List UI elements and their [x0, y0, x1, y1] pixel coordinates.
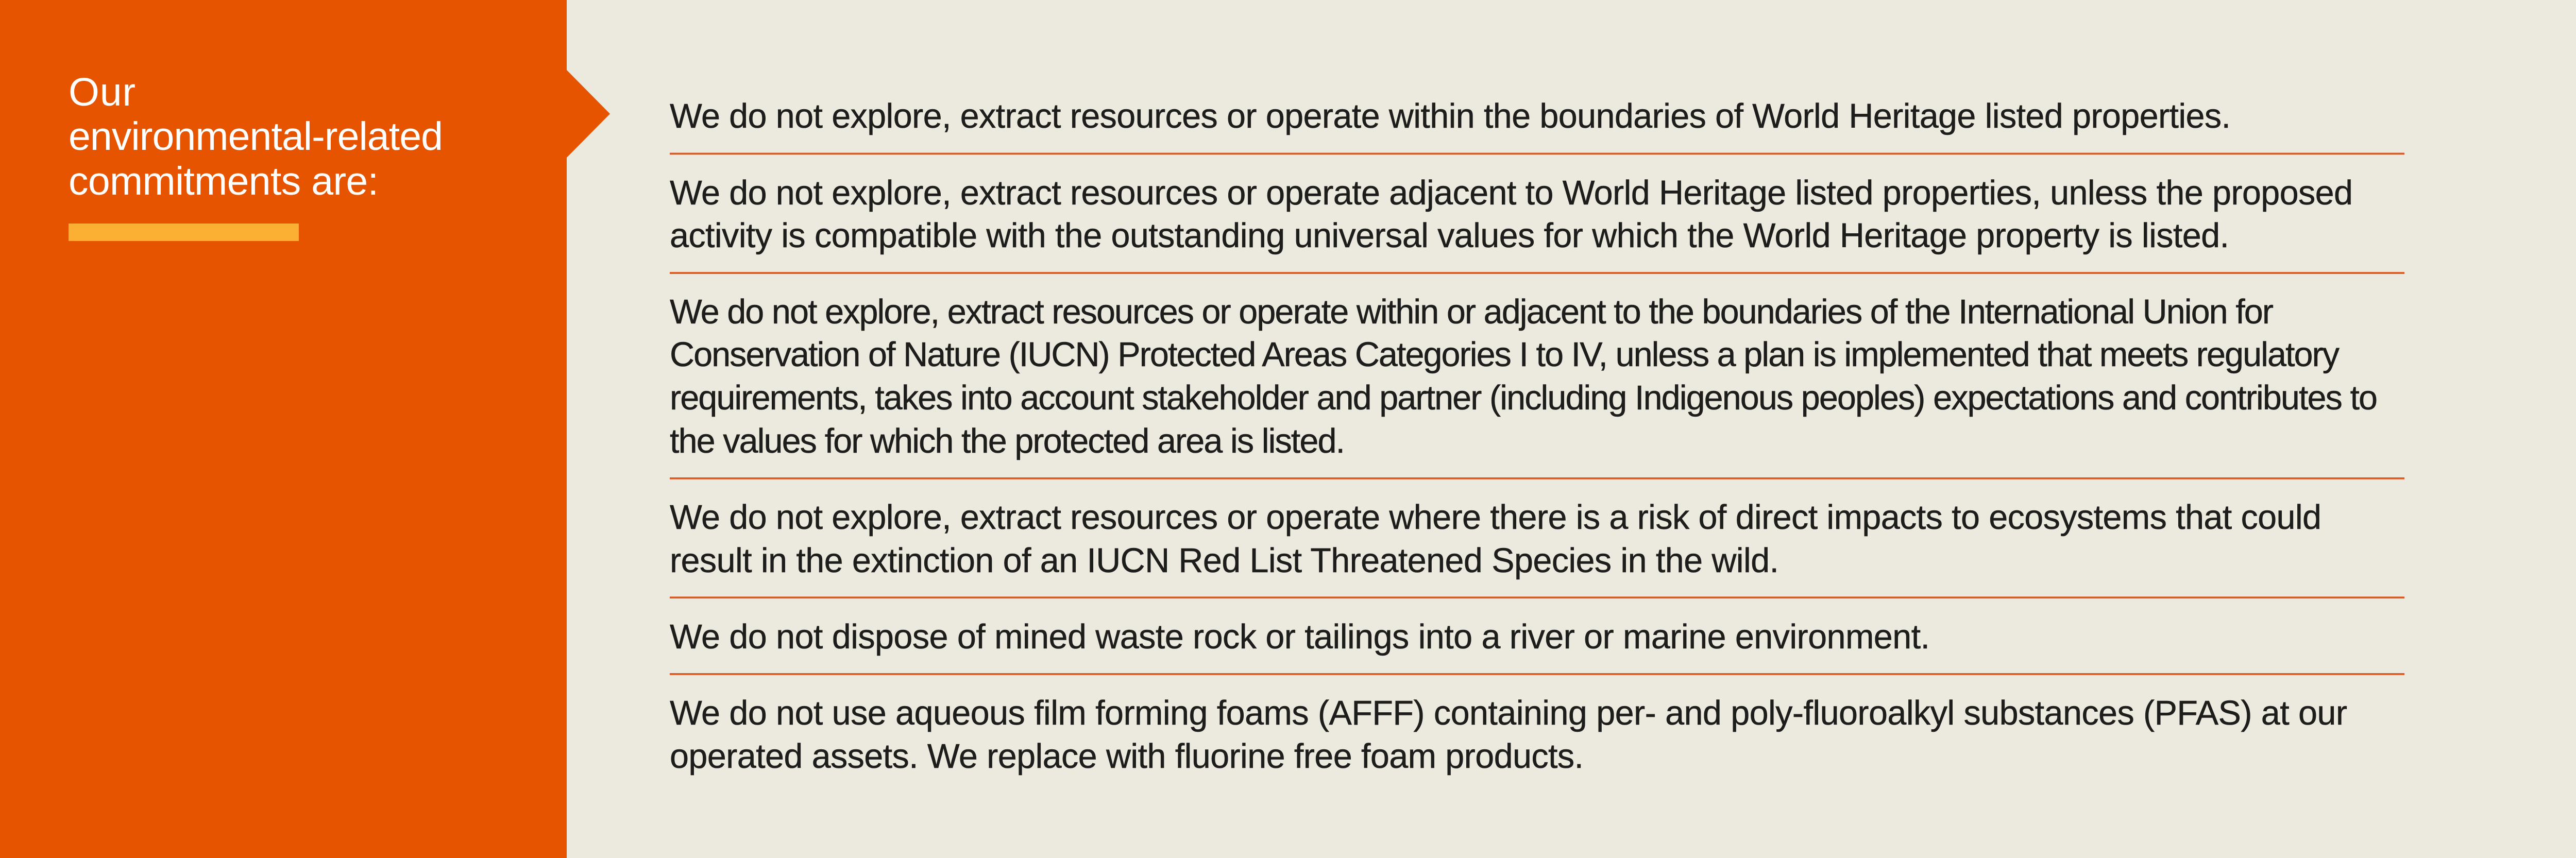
commitment 3: IUCN Protected Areas: requirements, takes into account stakeholder and partner (including Indigenous peoples) expectations and contributes to: [670, 379, 2378, 417]
commitment 3: IUCN Protected Areas: We do not explore, extract resources or operate within or adjacent to the boundaries of the International Union for: [670, 293, 2274, 331]
commitment 4: IUCN Red List species: We do not explore, extract resources or operate where there is a risk of direct impacts to ecosystems that could: [670, 499, 2321, 537]
commitment 6: AFFF and PFAS foams: We do not use aqueous film forming foams (AFFF) containing per- and poly-fluoroalkyl substances (PFAS) at our: [670, 694, 2347, 732]
commitment 2: adjacent to World Heritage: activity is compatible with the outstanding universal values for which the World Heritage property is listed.: [670, 217, 2229, 255]
panel: orange sidebar with arrow pointer: [0, 0, 610, 858]
commitment 4: IUCN Red List species: result in the extinction of an IUCN Red List Threatened Species in the wild.: [670, 542, 1779, 580]
commitment 5: mined waste disposal: We do not dispose of mined waste rock or tailings into a river or marine environment.: [670, 618, 1930, 656]
title: [69, 70, 443, 203]
commitment 3: IUCN Protected Areas: the values for which the protected area is listed.: [670, 422, 1345, 460]
title: commitments are:: [69, 159, 379, 203]
title: environmental-related: [69, 114, 443, 159]
commitment 1: World Heritage boundaries: We do not explore, extract resources or operate within the boundaries of World Heritage listed properties.: [670, 97, 2231, 135]
accent bar: [69, 224, 299, 241]
commitment 6: AFFF and PFAS foams: [670, 694, 2347, 776]
title: Our: [69, 70, 135, 114]
commitment 3: IUCN Protected Areas: Conservation of Nature (IUCN) Protected Areas Categories I to IV, unless a plan is implemented that meets regulatory: [670, 336, 2340, 374]
commitment 6: AFFF and PFAS foams: operated assets. We replace with fluorine free foam products.: [670, 737, 1584, 776]
commitment 3: IUCN Protected Areas: [670, 293, 2378, 460]
commitment 2: adjacent to World Heritage: We do not explore, extract resources or operate adjacent to World Heritage listed properties, unless the proposed: [670, 174, 2353, 212]
commitment 4: IUCN Red List species: [670, 499, 2321, 580]
commitment 2: adjacent to World Heritage: [670, 174, 2353, 255]
